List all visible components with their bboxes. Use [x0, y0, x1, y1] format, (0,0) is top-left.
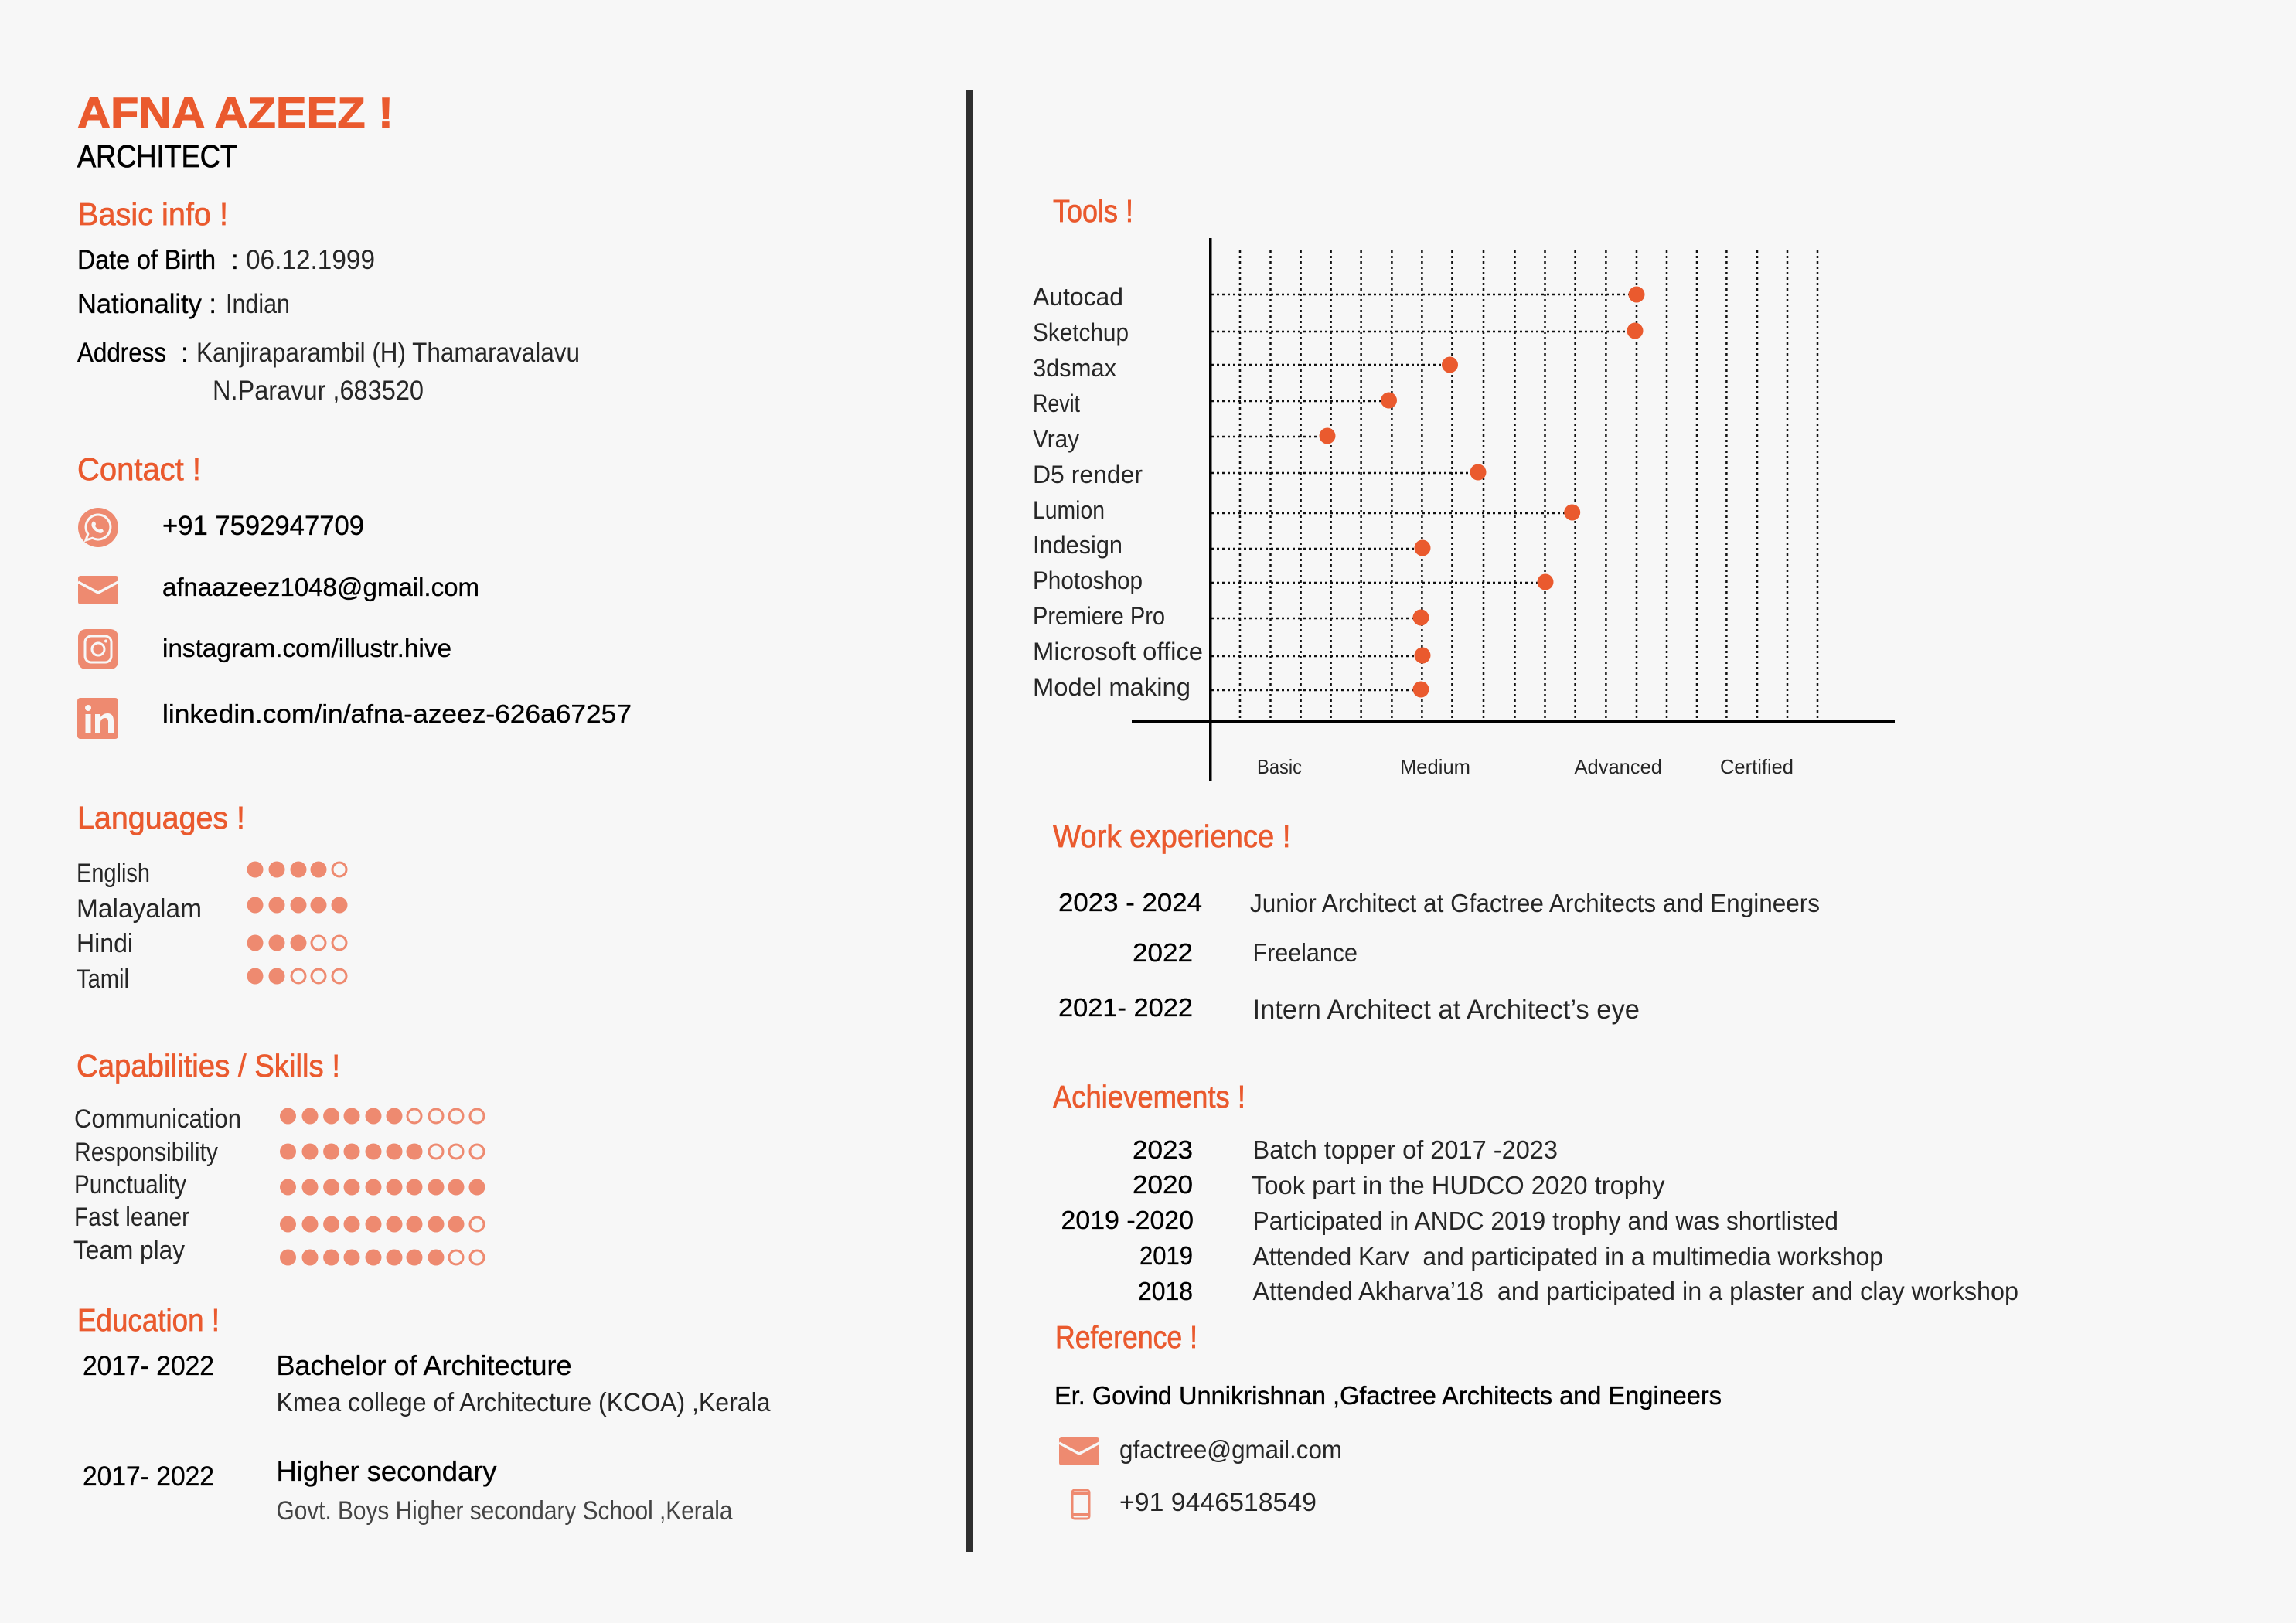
icon: whatsapp — [78, 508, 118, 547]
data points — [1319, 286, 1645, 697]
axes — [1132, 238, 1895, 781]
higher secondary entry: Higher secondary — [277, 1455, 496, 1487]
skill labels: Team play — [73, 1236, 185, 1265]
panel: achievements — [1053, 1079, 2018, 1305]
job 2023-2024: Junior Architect at Gfactree Architects and Engineers — [1250, 889, 1820, 917]
tool labels: Indesign — [1033, 531, 1122, 559]
language labels: Tamil — [77, 965, 129, 994]
date of birth — [77, 245, 375, 275]
x axis labels — [1257, 755, 1794, 778]
tool labels: Model making — [1033, 673, 1191, 701]
tool labels: Autocad — [1033, 283, 1123, 311]
icon: mail — [78, 576, 118, 604]
higher secondary entry — [83, 1455, 733, 1526]
tool labels — [1033, 283, 1203, 701]
degree entry: Bachelor of Architecture — [277, 1349, 572, 1381]
instagram handle: instagram.com/illustr.hive — [162, 634, 451, 662]
panel: reference — [1054, 1319, 1722, 1519]
rating: hindi — [247, 935, 346, 951]
rating: fast learner — [280, 1216, 484, 1232]
address: N.Paravur ,683520 — [213, 376, 424, 406]
address: Kanjiraparambil (H) Thamaravalavu — [196, 338, 580, 368]
achievement 2019: Attended Karv and participated in a multimedia workshop — [1252, 1242, 1883, 1271]
heading: contact: Contact ! — [77, 451, 201, 487]
achievement 2020: Took part in the HUDCO 2020 trophy — [1252, 1171, 1665, 1199]
heading: achievements: Achievements ! — [1053, 1079, 1245, 1114]
date of birth: Date of Birth — [77, 245, 216, 275]
tool labels: Microsoft office — [1033, 638, 1203, 665]
achievement 2019: 2019 — [1139, 1241, 1193, 1270]
rating: communication — [280, 1108, 484, 1124]
job 2021-2022: Intern Architect at Architect’s eye — [1252, 995, 1640, 1025]
panel: languages — [77, 800, 348, 994]
skill labels: Punctuality — [74, 1170, 186, 1199]
heading: languages: Languages ! — [77, 800, 245, 835]
rating: team play — [280, 1249, 484, 1266]
icon: reference phone — [1072, 1490, 1089, 1519]
reference email: gfactree@gmail.com — [1119, 1435, 1342, 1464]
rating: responsibility — [280, 1144, 484, 1159]
panel: basic info — [77, 196, 580, 406]
achievement 2020: 2020 — [1133, 1170, 1193, 1199]
panel: contact — [77, 451, 632, 739]
higher secondary entry: 2017- 2022 — [83, 1461, 214, 1492]
tool labels: Lumion — [1033, 496, 1105, 524]
x axis labels: Basic — [1257, 755, 1302, 778]
skill labels: Responsibility — [74, 1138, 218, 1167]
skill labels: Fast leaner — [74, 1203, 189, 1232]
achievement 2023: 2023 — [1133, 1135, 1193, 1164]
heading: work experience: Work experience ! — [1053, 818, 1291, 854]
job 2022 — [1133, 938, 1358, 967]
address: Address — [77, 338, 166, 368]
achievement 2023: Batch topper of 2017 -2023 — [1252, 1135, 1558, 1164]
phone number: +91 7592947709 — [162, 511, 364, 541]
linkedin url: linkedin.com/in/afna-azeez-626a67257 — [162, 699, 632, 728]
title: AFNA AZEEZ ! — [77, 88, 393, 137]
date of birth: 06.12.1999 — [246, 245, 375, 275]
degree entry — [83, 1349, 771, 1417]
achievement 2018: Attended Akharva’18 and participated in a plaster and clay workshop — [1252, 1277, 2018, 1305]
higher secondary entry: Govt. Boys Higher secondary School ,Kerala — [277, 1496, 733, 1526]
nationality — [77, 289, 290, 319]
language labels: Malayalam — [77, 894, 202, 924]
job 2021-2022 — [1058, 993, 1640, 1025]
tool labels: Photoshop — [1033, 567, 1143, 594]
job 2022: 2022 — [1133, 938, 1193, 967]
tool labels: Revit — [1033, 390, 1080, 417]
date of birth: : — [231, 245, 239, 275]
rating: malayalam — [247, 897, 348, 914]
address — [77, 338, 580, 406]
email: afnaazeez1048@gmail.com — [162, 573, 479, 601]
achievement 2019-2020: 2019 -2020 — [1061, 1206, 1194, 1234]
nationality: Indian — [226, 289, 290, 319]
reference name: Er. Govind Unnikrishnan ,Gfactree Architects and Engineers — [1054, 1381, 1722, 1410]
job 2023-2024: 2023 - 2024 — [1058, 888, 1202, 917]
tool labels: Premiere Pro — [1033, 602, 1165, 630]
heading: education: Education ! — [77, 1302, 220, 1338]
tool labels: Sketchup — [1033, 318, 1129, 346]
heading: capabilities: Capabilities / Skills ! — [77, 1048, 340, 1084]
skill labels: Communication — [74, 1104, 241, 1134]
x axis labels: Medium — [1400, 755, 1470, 778]
title — [77, 88, 393, 174]
x axis labels: Certified — [1720, 755, 1794, 778]
tool labels: 3dsmax — [1033, 354, 1116, 382]
x axis labels: Advanced — [1574, 755, 1662, 778]
rating: english — [247, 861, 346, 878]
skill labels — [73, 1104, 241, 1265]
panel: education — [77, 1302, 771, 1526]
job 2022: Freelance — [1252, 938, 1358, 967]
job 2021-2022: 2021- 2022 — [1058, 993, 1193, 1022]
degree entry: 2017- 2022 — [83, 1351, 214, 1381]
nationality: Nationality : — [77, 289, 216, 319]
achievement 2019-2020: Participated in ANDC 2019 trophy and was shortlisted — [1252, 1206, 1838, 1235]
address: : — [181, 338, 189, 368]
language labels: Hindi — [77, 929, 133, 958]
icon: instagram — [78, 629, 118, 669]
subtitle: ARCHITECT — [77, 138, 237, 174]
tool labels: Vray — [1033, 425, 1079, 453]
tool labels: D5 render — [1033, 461, 1143, 488]
language labels: English — [77, 859, 150, 888]
reference phone number: +91 9446518549 — [1119, 1488, 1317, 1516]
heading: basic info: Basic info ! — [78, 196, 228, 232]
heading: reference: Reference ! — [1055, 1319, 1197, 1355]
icon: linkedin — [77, 698, 118, 739]
rating: tamil — [247, 968, 346, 985]
degree entry: Kmea college of Architecture (KCOA) ,Kerala — [277, 1388, 771, 1417]
panel: capabilities and skills — [73, 1048, 485, 1266]
divider — [966, 90, 973, 1552]
rating: punctuality — [280, 1179, 485, 1195]
grid lines — [1211, 250, 1817, 722]
panel: tools chart — [1033, 193, 1895, 781]
achievement 2018: 2018 — [1138, 1277, 1193, 1305]
panel: work experience — [1053, 818, 1820, 1025]
language labels — [77, 859, 202, 994]
icon: reference mail — [1059, 1437, 1099, 1465]
heading: tools: Tools ! — [1053, 193, 1133, 229]
